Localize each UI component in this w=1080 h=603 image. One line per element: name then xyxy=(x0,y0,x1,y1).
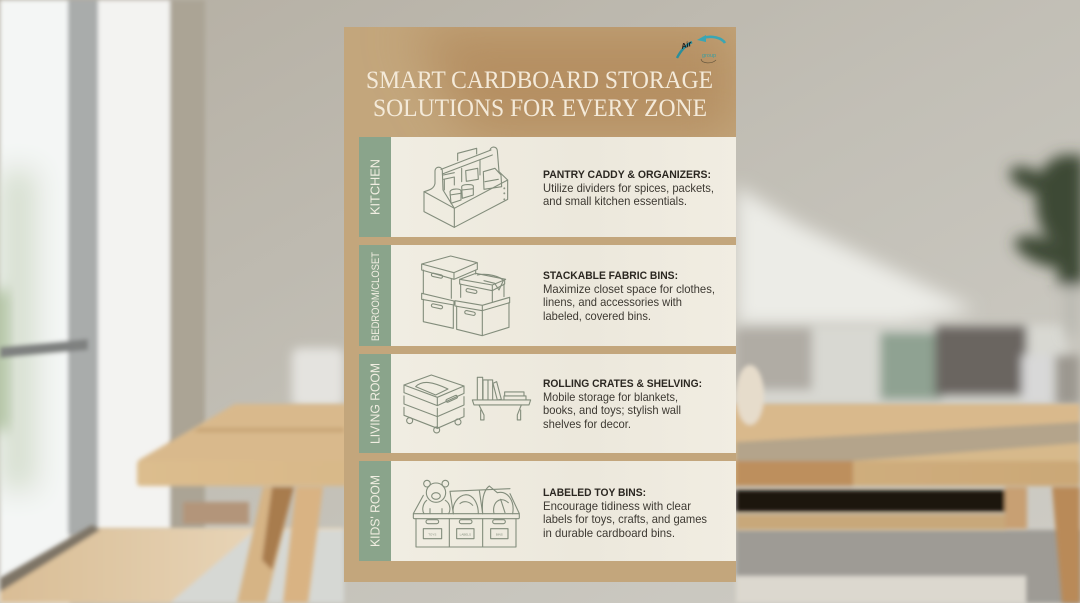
logo: Air xyxy=(679,39,694,51)
panel background xyxy=(359,354,736,453)
logo xyxy=(677,35,725,63)
zone label: KITCHEN xyxy=(368,159,382,215)
description: and small kitchen essentials. xyxy=(543,195,687,208)
description: books, and toys; stylish wall xyxy=(543,404,681,417)
panel: kids' room xyxy=(359,461,736,561)
description xyxy=(543,378,702,431)
title: SOLUTIONS FOR EVERY ZONE xyxy=(373,93,707,122)
title: SMART CARDBOARD STORAGE xyxy=(366,65,713,94)
zone tab xyxy=(359,354,391,453)
description: Utilize dividers for spices, packets, xyxy=(543,182,714,195)
zone label: BEDROOM/CLOSET xyxy=(370,252,382,341)
wooden table xyxy=(137,365,1080,603)
panel background xyxy=(359,245,736,346)
icon: labeled toy bins: BINS xyxy=(496,532,503,536)
panel background xyxy=(359,461,736,561)
zone tab xyxy=(359,461,391,561)
zone tab xyxy=(359,137,391,237)
description: Maximize closet space for clothes, xyxy=(543,283,715,296)
panel: living room xyxy=(359,354,736,453)
description: LABELED TOY BINS: xyxy=(543,487,646,499)
icon: pantry caddy xyxy=(424,147,508,227)
icon: stackable bins xyxy=(422,256,510,336)
poster board xyxy=(344,27,736,582)
icon: rolling crate and shelf xyxy=(404,375,531,433)
description: labels for toys, crafts, and games xyxy=(543,513,707,526)
description: STACKABLE FABRIC BINS: xyxy=(543,270,678,282)
description: linens, and accessories with xyxy=(543,296,682,309)
zone label: KIDS' ROOM xyxy=(368,475,382,547)
icon: labeled toy bins xyxy=(413,480,519,547)
icon: labeled toy bins: LABELS xyxy=(460,532,471,536)
description xyxy=(543,487,707,540)
description: Encourage tidiness with clear xyxy=(543,500,691,513)
title xyxy=(366,65,713,122)
description: Mobile storage for blankets, xyxy=(543,391,678,404)
window and curtain xyxy=(0,0,249,603)
description: in durable cardboard bins. xyxy=(543,527,675,540)
description: PANTRY CADDY & ORGANIZERS: xyxy=(543,169,711,181)
sofa and cushions xyxy=(292,325,1080,408)
zone tab xyxy=(359,245,391,346)
zone label: LIVING ROOM xyxy=(368,363,382,444)
logo: group xyxy=(702,53,716,59)
description: shelves for decor. xyxy=(543,418,631,431)
icon: labeled toy bins: TOYS xyxy=(428,532,436,536)
description xyxy=(543,270,715,323)
floor xyxy=(0,525,1080,603)
sunlight patch on wall xyxy=(736,186,975,325)
description: labeled, covered bins. xyxy=(543,310,651,323)
panel: bedroom/closet xyxy=(359,245,736,346)
panel background xyxy=(359,137,736,237)
plant xyxy=(1005,155,1080,335)
poster xyxy=(344,27,736,582)
description: ROLLING CRATES & SHELVING: xyxy=(543,378,702,390)
description xyxy=(543,169,714,208)
panel: kitchen xyxy=(359,137,736,237)
